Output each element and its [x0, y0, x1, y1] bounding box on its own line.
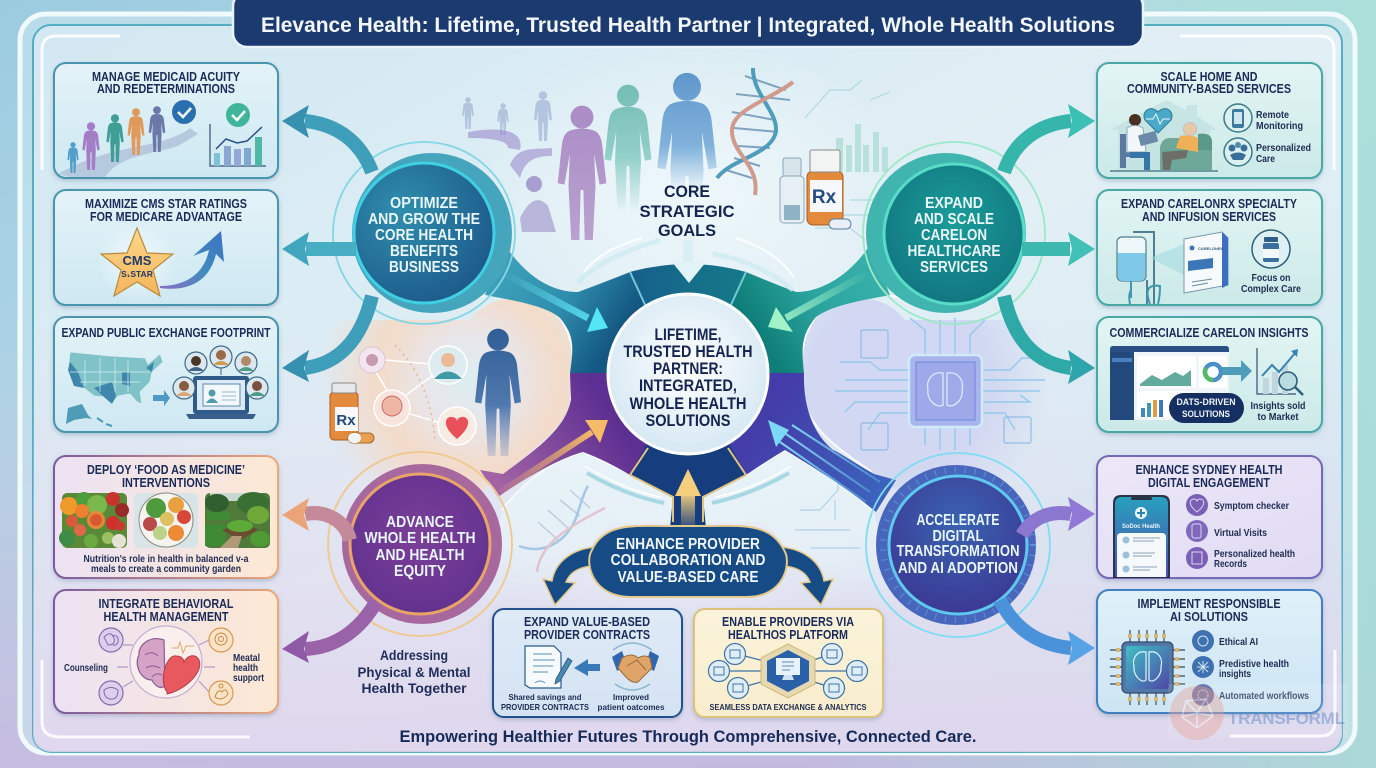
goal circle: Carelon services: SERVICES: [920, 259, 988, 276]
arrow: goals down into hub: [672, 240, 706, 283]
panel: home and community services: Monitoring: [1256, 120, 1303, 132]
icon: US map: [66, 352, 170, 426]
title banner: [233, 0, 1143, 47]
image: vegetables: [59, 492, 129, 548]
icon: IV bag: [1117, 232, 1184, 304]
central hub ring: [480, 238, 896, 528]
illustration: whole person care network: [359, 329, 521, 456]
panel: responsible AI: Automated workflows: [1219, 690, 1309, 702]
panel: value-based contracts: Improved: [613, 692, 649, 702]
banner: provider collaboration: ENHANCE PROVIDER: [616, 536, 760, 553]
icon: phone app: [1113, 495, 1170, 578]
icon: remote monitoring: [1224, 104, 1252, 132]
panel: behavioral health: [54, 590, 278, 713]
goal circle: core health benefits: [333, 142, 515, 324]
centre circle: [608, 294, 768, 454]
icon: insights chart with magnifier: [1257, 348, 1303, 395]
icon: phone app: SoDoc Health: [1122, 524, 1160, 530]
panel: behavioral health: Counseling: [64, 662, 108, 674]
icon: AI badges: [1192, 630, 1214, 706]
panel: home and community services: Personalized: [1256, 142, 1311, 154]
image: community garden: [205, 492, 270, 548]
goal circle: digital and AI: TRANSFORMATION: [896, 543, 1020, 560]
heading: core strategic goals: CORE: [664, 182, 710, 201]
image: balanced meal plate: [134, 493, 198, 548]
panel: glass backdrop bottom centre: [480, 450, 896, 610]
panel: home and community services: COMMUNITY-BASED SERVICES: [1127, 81, 1291, 96]
watermark: [1168, 684, 1348, 740]
panel: CarelonRx specialty: Complex Care: [1241, 283, 1301, 295]
panel: home and community services: SCALE HOME AND: [1160, 69, 1258, 84]
arrows: right side top three: [1004, 104, 1095, 384]
goal circle: Carelon services: AND SCALE: [914, 211, 994, 228]
arrow: banner down left: [543, 547, 596, 605]
panel: home and community services: [1097, 63, 1322, 178]
panel: manage Medicaid: AND REDETERMINATIONS: [97, 81, 235, 96]
panel: HealthOS platform: [694, 609, 883, 717]
icon: home care scene: [1110, 100, 1218, 171]
icon: blue check badge: [172, 100, 196, 124]
panel: CMS star ratings: MAXIMIZE CMS STAR RATINGS: [85, 196, 247, 211]
panel: responsible AI: Ethical AI: [1219, 636, 1258, 648]
illustration: AI chip circuit: [835, 318, 1045, 450]
panel: CarelonRx specialty: EXPAND CARELONRX SPECIALTY: [1121, 196, 1297, 211]
centre circle: INTEGRATED,: [639, 376, 737, 395]
panel: food as medicine: meals to create a community garden: [91, 563, 241, 575]
panel: Sydney Health: ENHANCE SYDNEY HEALTH: [1136, 462, 1282, 477]
icon: CMS star: CMS: [123, 253, 152, 268]
goal circle: whole health: AND HEALTH: [376, 547, 464, 564]
arrow: banner down right: [780, 547, 833, 605]
panel: public exchange: EXPAND PUBLIC EXCHANGE FOOTPRINT: [62, 325, 270, 340]
panel: glass backdrop middle right: [802, 294, 1056, 530]
panel: Carelon Insights: COMMERCIALIZE CARELON INSIGHTS: [1110, 325, 1309, 340]
dashboard screen: [1110, 346, 1229, 420]
icon: platform network: [708, 644, 868, 698]
panel: value-based contracts: EXPAND VALUE-BASED: [524, 614, 650, 629]
panel: responsible AI: Predistive health: [1219, 658, 1289, 670]
pill: data-driven solutions: SOLUTIONS: [1182, 409, 1230, 420]
panel: manage Medicaid: [54, 63, 278, 178]
arrow to market: [1222, 360, 1252, 382]
banner: provider collaboration: [589, 526, 787, 597]
goal circle: digital and AI: ACCELERATE: [916, 512, 1000, 529]
central soft glow: [458, 40, 918, 640]
panel: food as medicine: INTERVENTIONS: [122, 475, 210, 490]
illustration: people and path behind goals: [462, 73, 717, 240]
arrow: top left into hub: [503, 273, 608, 332]
banner: provider collaboration: VALUE-BASED CARE: [618, 569, 758, 586]
icon: Rx bottle left: Rx: [336, 412, 356, 429]
panel: Carelon Insights: Insights sold: [1250, 400, 1306, 412]
goal circle: core health benefits: AND GROW THE: [368, 211, 480, 228]
panel: value-based contracts: patient oatcomes: [598, 702, 665, 712]
panel: Sydney Health: Records: [1214, 558, 1247, 570]
panel: Carelon Insights: to Market: [1258, 411, 1299, 423]
text block: physical and mental health: Health Together: [362, 681, 467, 696]
panel: manage Medicaid: MANAGE MEDICAID ACUITY: [92, 69, 240, 84]
text block: physical and mental health: [358, 648, 470, 696]
heading: core strategic goals: [640, 182, 734, 240]
panel: value-based contracts: Shared savings and: [508, 692, 582, 702]
goal circle: whole health: WHOLE HEALTH: [364, 530, 476, 547]
goal circle: core health benefits: BENEFITS: [390, 243, 458, 260]
icon: medication box: [1184, 232, 1228, 293]
goal circle: core health benefits: BUSINESS: [389, 259, 459, 276]
panel: responsible AI: insights: [1219, 668, 1251, 680]
arrow: outcomes to contract: [574, 659, 600, 676]
centre circle: TRUSTED HEALTH: [624, 342, 752, 361]
icon: mental health badges: [209, 628, 233, 705]
goal circle: whole health: ADVANCE: [386, 514, 454, 531]
panel: HealthOS platform: SEAMLESS DATA EXCHANGE & ANALYTICS: [710, 702, 867, 712]
goal circle: digital and AI: DIGITAL: [932, 528, 984, 545]
panel: Sydney Health: [1097, 456, 1322, 578]
panel: behavioral health: support: [233, 672, 264, 684]
goal circle: Carelon services: CARELON: [921, 227, 987, 244]
faded circuit bottom right: [795, 470, 860, 548]
arrow: top right into hub: [768, 273, 868, 332]
panel: home and community services: Remote: [1256, 109, 1289, 121]
panel: food as medicine: Nutrition's role in health in balanced v-a: [84, 553, 249, 565]
text block: physical and mental health: Physical & Mental: [358, 665, 470, 680]
watermark: TRANSFORML: [1228, 709, 1345, 728]
icon: personalized care: [1224, 138, 1252, 166]
heading: core strategic goals: STRATEGIC: [640, 202, 734, 221]
panel: glass arcs bottom centre: [585, 466, 791, 503]
panel: value-based contracts: PROVIDER CONTRACTS: [501, 702, 589, 712]
illustration: faded analytics chart: [805, 80, 890, 240]
icon: medication box: CARELONRX: [1198, 246, 1224, 251]
icon: CMS star: [97, 222, 177, 302]
arrows: right side lower two: [1000, 497, 1095, 665]
banner: provider collaboration: COLLABORATION AND: [610, 552, 766, 569]
goal circle: whole health: EQUITY: [394, 563, 446, 580]
icon: upward arrow: [160, 231, 224, 289]
centre circle: SOLUTIONS: [646, 411, 730, 430]
arrow up from provider banner: [675, 469, 701, 526]
arrows: left side lower two: [282, 498, 376, 663]
icon: counseling badges: [99, 628, 123, 705]
goal circle: core health benefits: OPTIMIZE: [390, 195, 458, 212]
panel: CarelonRx specialty: AND INFUSION SERVICES: [1142, 209, 1276, 224]
centre circle: WHOLE HEALTH: [630, 394, 746, 413]
goal circle: core health benefits: CORE HEALTH: [375, 227, 473, 244]
heading: core strategic goals: GOALS: [658, 221, 716, 240]
panel: public exchange: [54, 317, 278, 432]
panel: food as medicine: [54, 456, 278, 578]
text block: physical and mental health: Addressing: [380, 648, 448, 663]
panel: value-based contracts: PROVIDER CONTRACTS: [524, 627, 650, 642]
icon: AI brain chip: [1110, 630, 1185, 705]
panel: food as medicine: DEPLOY ‘FOOD AS MEDICINE’: [87, 462, 245, 477]
panel: responsible AI: IMPLEMENT RESPONSIBLE: [1138, 596, 1281, 611]
panel: glass backdrop middle left: [320, 294, 573, 530]
panel: behavioral health: HEALTH MANAGEMENT: [104, 609, 228, 624]
panel: responsible AI: [1097, 590, 1322, 713]
icon: feature badges: [1186, 494, 1208, 569]
goal circle: digital and AI: AND AI ADOPTION: [898, 560, 1018, 577]
panel: Sydney Health: Personalized health: [1214, 548, 1295, 560]
centre circle: PARTNER:: [653, 359, 723, 378]
arrow: bottom left into hub: [500, 420, 608, 492]
icon: handshake: [612, 643, 659, 690]
icon: Rx bottle left: [330, 383, 374, 443]
arrows: left side top three: [282, 105, 372, 382]
icon: focus on complex care: [1252, 230, 1290, 268]
panel: CMS star ratings: FOR MEDICARE ADVANTAGE: [90, 209, 242, 224]
panel: responsible AI: AI SOLUTIONS: [1170, 609, 1248, 624]
goal circle: Carelon services: HEALTHCARE: [908, 243, 1001, 260]
centre circle: LIFETIME,: [654, 325, 722, 344]
panel: HealthOS platform: ENABLE PROVIDERS VIA: [722, 614, 854, 629]
tagline: Empowering Healthier Futures Through Comprehensive, Connected Care.: [400, 727, 976, 746]
panel: behavioral health: Meatal: [233, 652, 260, 664]
faded DNA bottom centre: [519, 486, 605, 572]
panel: value-based contracts: [493, 609, 682, 717]
icon: contract document: [525, 646, 572, 688]
panel: Carelon Insights: [1097, 317, 1322, 432]
panel: CarelonRx specialty: [1097, 190, 1322, 305]
icon: Rx bottles: [780, 150, 851, 229]
panel: behavioral health: health: [233, 662, 258, 674]
goal circle: digital and AI: [866, 453, 1050, 637]
panel: CarelonRx specialty: Focus on: [1252, 272, 1290, 284]
icon: green check and growth chart: [210, 103, 266, 166]
pill: data-driven solutions: [1169, 393, 1244, 423]
goal circle: whole health: [328, 452, 512, 636]
panel: Sydney Health: Symptom checker: [1214, 500, 1289, 512]
icon: Rx bottles: Rx: [812, 187, 837, 208]
panel: Sydney Health: Virtual Visits: [1214, 527, 1267, 539]
goal circle: Carelon services: EXPAND: [925, 195, 983, 212]
icon: laptop with member avatars: [173, 346, 268, 419]
pill: data-driven solutions: DATS-DRIVEN: [1176, 397, 1236, 408]
icon: brain and heart: [117, 626, 215, 698]
icon: CMS star: S₁STAR: [121, 269, 153, 279]
illustration: DNA helix: [717, 68, 793, 195]
goal circle: Carelon services: [863, 142, 1045, 324]
panel: behavioral health: INTEGRATE BEHAVIORAL: [98, 596, 234, 611]
panel: Sydney Health: DIGITAL ENGAGEMENT: [1148, 475, 1270, 490]
panel: HealthOS platform: HEALTHOS PLATFORM: [728, 627, 848, 642]
panel: home and community services: Care: [1256, 153, 1275, 165]
title banner: Elevance Health: Lifetime, Trusted Health Partner | Integrated, Whole Health Solutions: [261, 14, 1115, 37]
arrow: bottom right into hub: [768, 420, 880, 502]
panel: CMS star ratings: [54, 190, 278, 305]
icon: rising path with people: [58, 106, 198, 177]
